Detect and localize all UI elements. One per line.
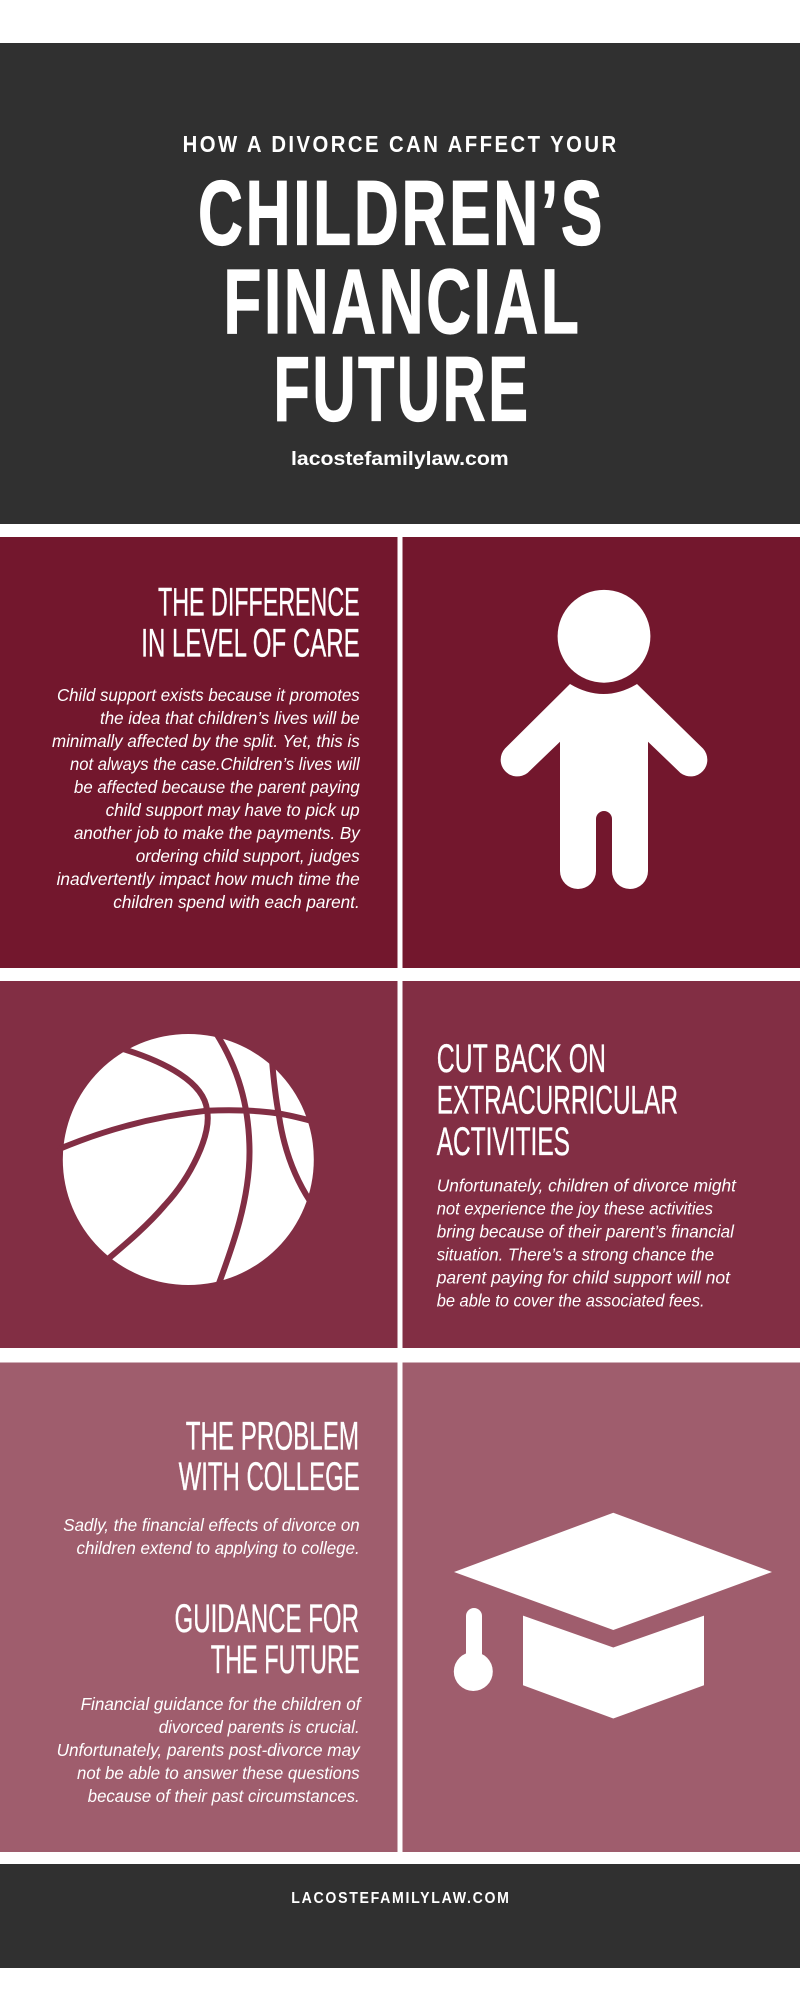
header kicker: HOW A DIVORCE CAN AFFECT YOUR (183, 131, 619, 157)
body text: guidance: Financial guidance for the children of (81, 1694, 363, 1714)
body text: level of care: Child support exists because it promotes (57, 685, 360, 705)
icon: child (501, 590, 707, 889)
body text: guidance: because of their past circumstances. (88, 1786, 360, 1806)
body text: level of care: another job to make the payments. By (74, 823, 361, 843)
panel: graduation cap icon (402, 1362, 800, 1852)
body text: extracurricular: bring because of their parent’s financial (437, 1222, 735, 1242)
heading: the problem with college: THE PROBLEM (186, 1415, 359, 1459)
heading: cut back on extracurricular activities (437, 1037, 678, 1164)
body text: guidance: divorced parents is crucial. (159, 1717, 360, 1737)
title: CHILDREN’S (198, 163, 605, 265)
panel: basketball icon (0, 981, 398, 1348)
body text: guidance: Unfortunately, parents post-divorce may (57, 1740, 361, 1760)
body text: level of care: children spend with each parent. (113, 892, 360, 912)
panel: college and guidance (0, 1362, 398, 1852)
body text: guidance (57, 1694, 363, 1806)
body text: extracurricular: not experience the joy these activities (437, 1199, 713, 1219)
heading: guidance for the future: GUIDANCE FOR (174, 1597, 359, 1641)
title: FUTURE (274, 339, 530, 441)
heading: cut back on extracurricular activities: CUT BACK ON (437, 1037, 606, 1081)
heading: the difference in level of care: THE DIFFERENCE (158, 581, 360, 625)
panel: the difference in level of care (0, 537, 398, 968)
heading: guidance for the future: THE FUTURE (211, 1638, 360, 1682)
icon: basketball (58, 1033, 314, 1286)
body text: college: children extend to applying to college. (76, 1538, 360, 1558)
heading: cut back on extracurricular activities: ACTIVITIES (437, 1120, 570, 1164)
body text: level of care: ordering child support, judges (136, 846, 360, 866)
heading: the difference in level of care: IN LEVEL OF CARE (141, 621, 360, 665)
footer website: LACOSTEFAMILYLAW.COM (291, 1890, 511, 1907)
panel: footer (0, 1864, 800, 1968)
body text: extracurricular (436, 1176, 737, 1311)
title (198, 163, 605, 441)
body text: level of care: child support may have to pick up (106, 800, 360, 820)
body text: level of care: not always the case.Children’s lives will (70, 754, 361, 774)
heading: the difference in level of care (141, 581, 360, 665)
body text: college: Sadly, the financial effects of divorce on (63, 1515, 360, 1535)
body text: extracurricular: Unfortunately, children of divorce might (437, 1176, 737, 1196)
body text: level of care: be affected because the parent paying (74, 777, 360, 797)
panel: cut back on extracurricular activities (402, 981, 800, 1348)
body text: level of care: minimally affected by the split. Yet, this is (52, 731, 360, 751)
body text: college (63, 1515, 360, 1558)
body text: guidance: not be able to answer these questions (77, 1763, 360, 1783)
heading: the problem with college: WITH COLLEGE (179, 1455, 360, 1499)
body text: level of care: inadvertently impact how much time the (57, 869, 360, 889)
panel: child icon (402, 537, 800, 968)
body text: level of care: the idea that children’s lives will be (100, 708, 360, 728)
heading: guidance for the future (174, 1597, 360, 1682)
body text: extracurricular: parent paying for child support will not (436, 1268, 731, 1288)
heading: the problem with college (179, 1415, 360, 1499)
header website: lacostefamilylaw.com (291, 448, 509, 470)
panel: header (0, 43, 800, 524)
icon: graduation cap (454, 1513, 772, 1718)
title: FINANCIAL (224, 251, 582, 353)
body text: extracurricular: be able to cover the associated fees. (437, 1291, 705, 1311)
body text: extracurricular: situation. There’s a strong chance the (437, 1245, 714, 1265)
body text: level of care (52, 685, 361, 912)
